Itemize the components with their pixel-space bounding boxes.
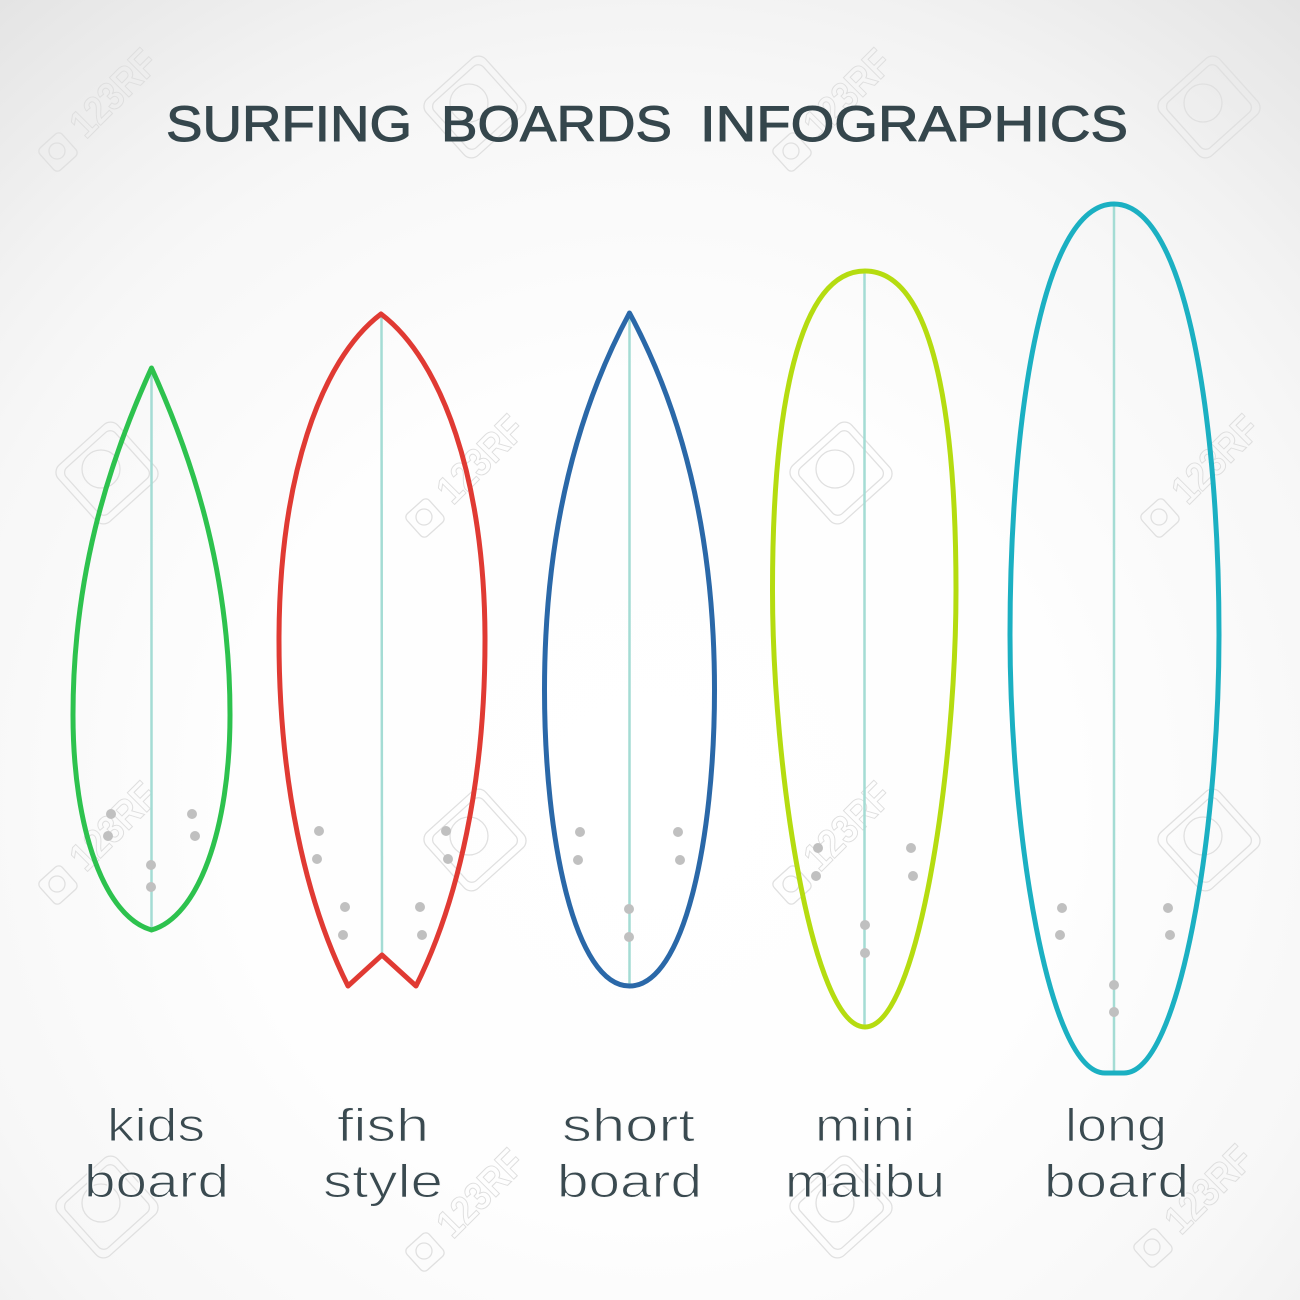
- board: fish style: [279, 314, 485, 986]
- watermarks: 123RF: [1163, 407, 1269, 512]
- label: short board: short: [562, 1099, 695, 1151]
- label: fish style: style: [323, 1155, 443, 1207]
- title: BOARDS: [441, 96, 672, 152]
- watermarks: 123RF: [61, 774, 167, 879]
- title: SURFING: [166, 96, 412, 152]
- watermarks: 123RF: [61, 41, 167, 146]
- watermarks: 123RF: [795, 41, 901, 146]
- watermarks: 123RF: [428, 1141, 534, 1246]
- label: long board: [1044, 1099, 1189, 1207]
- label: long board: long: [1065, 1099, 1167, 1151]
- watermarks: 123RF: [1156, 1137, 1262, 1242]
- label: short board: [557, 1099, 702, 1207]
- board: short board: [544, 313, 714, 986]
- watermarks: 123RF: [795, 774, 901, 879]
- label: short board: board: [557, 1155, 702, 1207]
- board: long board: [1010, 204, 1219, 1073]
- board: kids board: [73, 368, 230, 930]
- label: fish style: fish: [337, 1099, 429, 1151]
- watermarks: 123RF: [428, 407, 534, 512]
- label: kids board: kids: [107, 1099, 205, 1151]
- label: mini malibu: malibu: [785, 1155, 945, 1207]
- label: mini malibu: [785, 1099, 945, 1207]
- board: mini malibu: [772, 271, 956, 1027]
- label: long board: board: [1044, 1155, 1189, 1207]
- label: fish style: [323, 1099, 443, 1207]
- label: mini malibu: mini: [815, 1099, 915, 1151]
- title: [166, 96, 1128, 152]
- title: INFOGRAPHICS: [700, 96, 1128, 152]
- label: kids board: board: [84, 1155, 229, 1207]
- label: kids board: [84, 1099, 229, 1207]
